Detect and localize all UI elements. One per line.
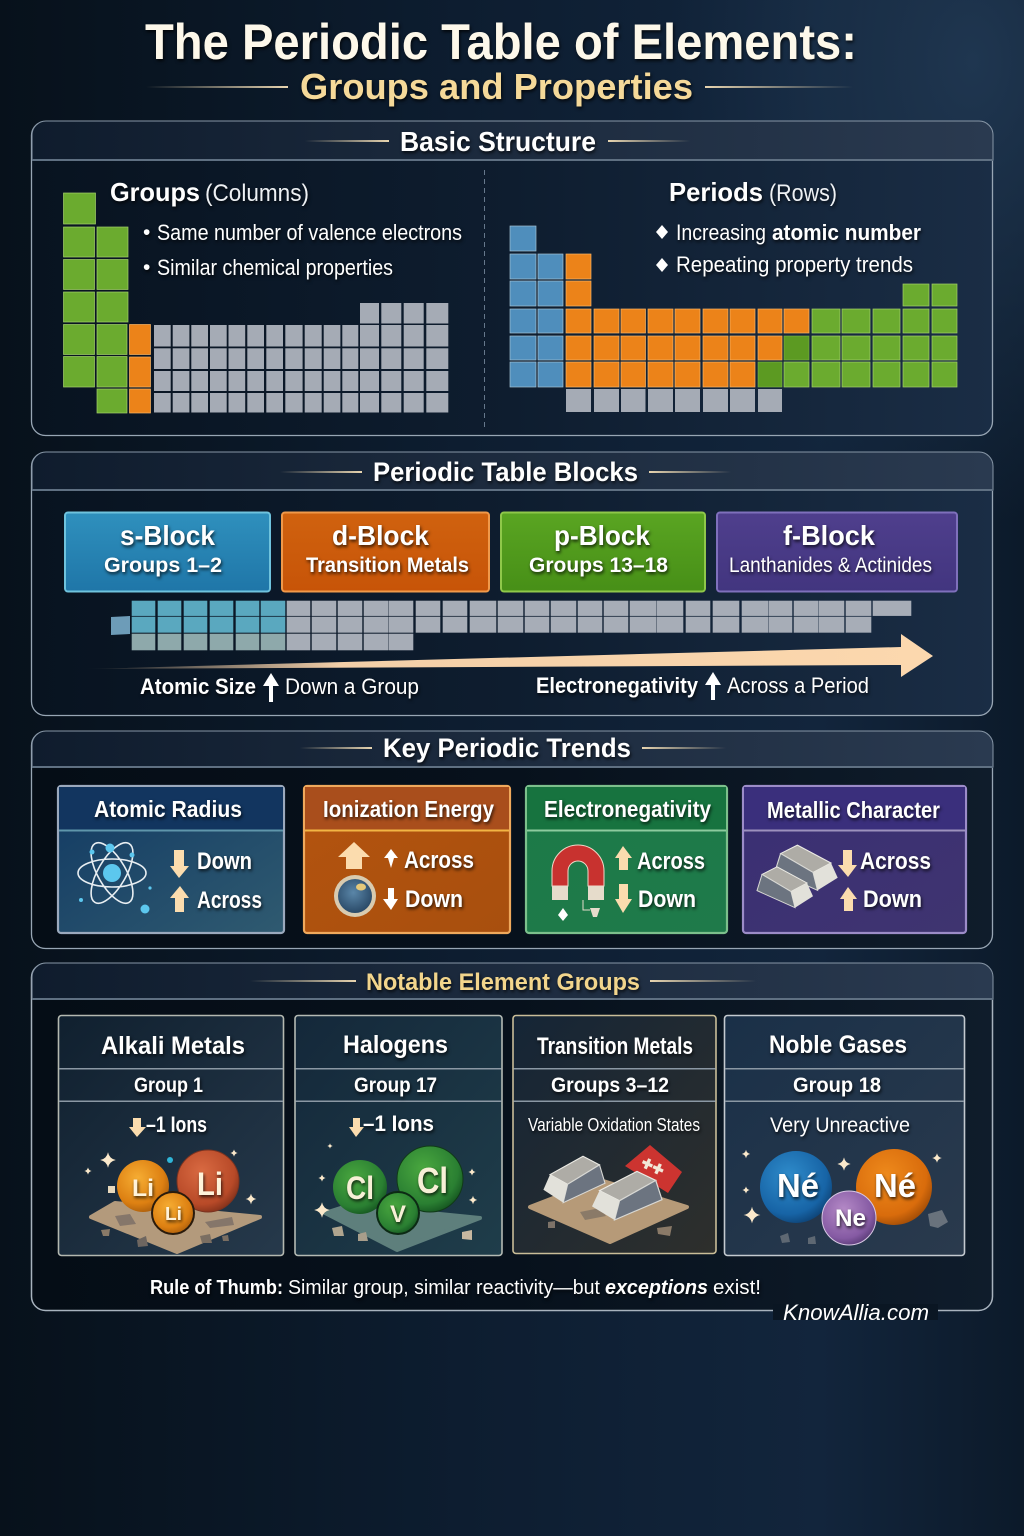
card: ionization energy: Across [404, 847, 474, 874]
card: electronegativity: Down [638, 886, 696, 913]
periods heading: Periods [669, 177, 763, 207]
illustration: lithium atoms: Li [197, 1166, 223, 1202]
card: metallic character [743, 786, 966, 933]
icon: magnet [552, 845, 604, 921]
arrow: large up [338, 842, 370, 869]
subtitle: Groups and Properties [300, 66, 693, 107]
card: alkali metals [58, 1016, 284, 1256]
caption: electronegativity: Electronegativity [536, 673, 699, 698]
illustration: chlorine atoms [314, 1143, 480, 1250]
groups heading [110, 177, 309, 207]
heading: trends: Key Periodic Trends [383, 733, 631, 763]
groups bullets: Same number of valence electrons [157, 220, 462, 245]
card: transition metals: Variable Oxidation States [528, 1115, 700, 1135]
title: The Periodic Table of Elements: [145, 14, 857, 70]
arrow: small up-down [384, 849, 398, 868]
card: noble gases: Group 18 [793, 1074, 881, 1097]
illustration: lithium atoms: Li [132, 1175, 154, 1202]
illustration: lithium atoms: Li [165, 1204, 182, 1224]
periods heading: (Rows) [769, 180, 837, 207]
f-block: f-Block [783, 520, 875, 551]
periods heading [669, 177, 837, 207]
chart: groups columns table [64, 193, 448, 413]
card: halogens: Halogens [343, 1031, 448, 1059]
caption: electronegativity [536, 672, 869, 700]
caption: atomic size [140, 673, 419, 702]
chart: blocks strip [111, 601, 911, 650]
illustration: chlorine atoms: Cl [346, 1170, 374, 1206]
card: electronegativity [526, 786, 727, 933]
card: ionization energy: Down [405, 886, 463, 913]
groups bullets: Similar chemical properties [157, 255, 393, 280]
d-block [282, 512, 489, 592]
panel: key periodic trends [32, 731, 993, 948]
f-block: Lanthanides & Actinides [729, 554, 932, 577]
rule of thumb: exceptions [605, 1277, 708, 1299]
ion label: –1 Ions [146, 1112, 207, 1137]
illustration: chlorine atoms: Cl [417, 1160, 448, 1201]
card: metallic character: Metallic Character [767, 797, 940, 823]
card: transition metals [513, 1016, 716, 1254]
arrow: down [170, 850, 189, 878]
card: electronegativity: Electronegativity [544, 796, 711, 822]
heading: notable groups: Notable Element Groups [366, 969, 640, 996]
illustration: lithium atoms [84, 1149, 260, 1252]
card: metallic character: Down [863, 886, 922, 913]
card: noble gases: Noble Gases [769, 1031, 907, 1059]
illustration: neon atoms: Né [874, 1167, 916, 1204]
brand credit: KnowAllia.com [783, 1300, 929, 1325]
card: atomic radius: Across [197, 887, 262, 914]
groups heading: (Columns) [205, 180, 309, 207]
icon: atom [78, 837, 152, 914]
illustration: metal bars [530, 1145, 687, 1242]
card: noble gases [724, 1016, 964, 1256]
groups heading: Groups [110, 177, 200, 207]
p-block: Groups 13–18 [529, 554, 668, 577]
groups bullets [143, 220, 462, 280]
rule of thumb [150, 1277, 761, 1299]
card: alkali metals: Group 1 [134, 1074, 203, 1097]
rule of thumb: Rule of Thumb: [150, 1277, 283, 1299]
caption: atomic size: Atomic Size [140, 674, 256, 699]
arrow: down [838, 850, 857, 877]
arrow: up [840, 887, 857, 911]
card: electronegativity: Across [637, 848, 705, 875]
rule of thumb: Similar group, similar reactivity—but [288, 1277, 600, 1299]
illustration: neon atoms: Ne [835, 1205, 866, 1232]
p-block [501, 512, 705, 592]
card: transition metals: Groups 3–12 [551, 1074, 669, 1097]
periods bullets: Repeating property trends [676, 252, 913, 277]
card: ionization energy: Ionization Energy [323, 796, 494, 822]
card: atomic radius: Atomic Radius [94, 796, 242, 822]
card: atomic radius [58, 786, 284, 933]
groups bullets: • [143, 221, 150, 244]
card: ionization energy [304, 786, 510, 933]
card: metallic character: Across [860, 848, 931, 875]
arrow: up [170, 886, 189, 912]
illustration: neon atoms [742, 1149, 948, 1245]
panel: notable element groups [32, 963, 993, 1310]
periods bullets [656, 220, 921, 277]
icon: sphere button [334, 875, 376, 917]
card: noble gases: Very Unreactive [770, 1114, 910, 1137]
periods bullets: atomic number [772, 220, 921, 245]
heading: basic structure: Basic Structure [400, 126, 596, 157]
s-block [65, 512, 270, 592]
groups bullets: • [143, 256, 150, 279]
f-block [717, 512, 957, 592]
illustration: neon atoms: Né [777, 1167, 819, 1204]
caption: atomic size: Down a Group [285, 674, 419, 699]
card: alkali metals: Alkali Metals [101, 1032, 245, 1060]
s-block: Groups 1–2 [104, 554, 222, 577]
heading: blocks: Periodic Table Blocks [373, 457, 638, 487]
card: halogens [295, 1016, 502, 1256]
s-block: s-Block [120, 520, 215, 551]
arrow: down [615, 884, 632, 913]
rule of thumb: exist! [713, 1277, 761, 1299]
periods bullets: Increasing [676, 220, 766, 245]
panel: periodic table blocks [32, 452, 993, 716]
ion label [129, 1112, 207, 1137]
card: atomic radius: Down [197, 848, 252, 875]
chart: periods rows table [510, 226, 957, 412]
panel: basic structure [32, 121, 993, 436]
arrow: small down [383, 888, 398, 910]
card: halogens: Group 17 [354, 1074, 437, 1097]
illustration: metal bars: ✚✚ [639, 1154, 667, 1179]
p-block: p-Block [554, 520, 650, 551]
d-block: Transition Metals [306, 554, 469, 577]
card: transition metals: Transition Metals [537, 1033, 693, 1060]
caption: electronegativity: Across a Period [727, 673, 869, 698]
arrow: trend direction [84, 634, 933, 677]
arrow: up [615, 846, 632, 870]
icon: metal ingots [757, 845, 838, 908]
illustration: chlorine atoms: V [390, 1201, 406, 1228]
d-block: d-Block [332, 520, 429, 551]
ion label: –1 Ions [363, 1111, 434, 1136]
